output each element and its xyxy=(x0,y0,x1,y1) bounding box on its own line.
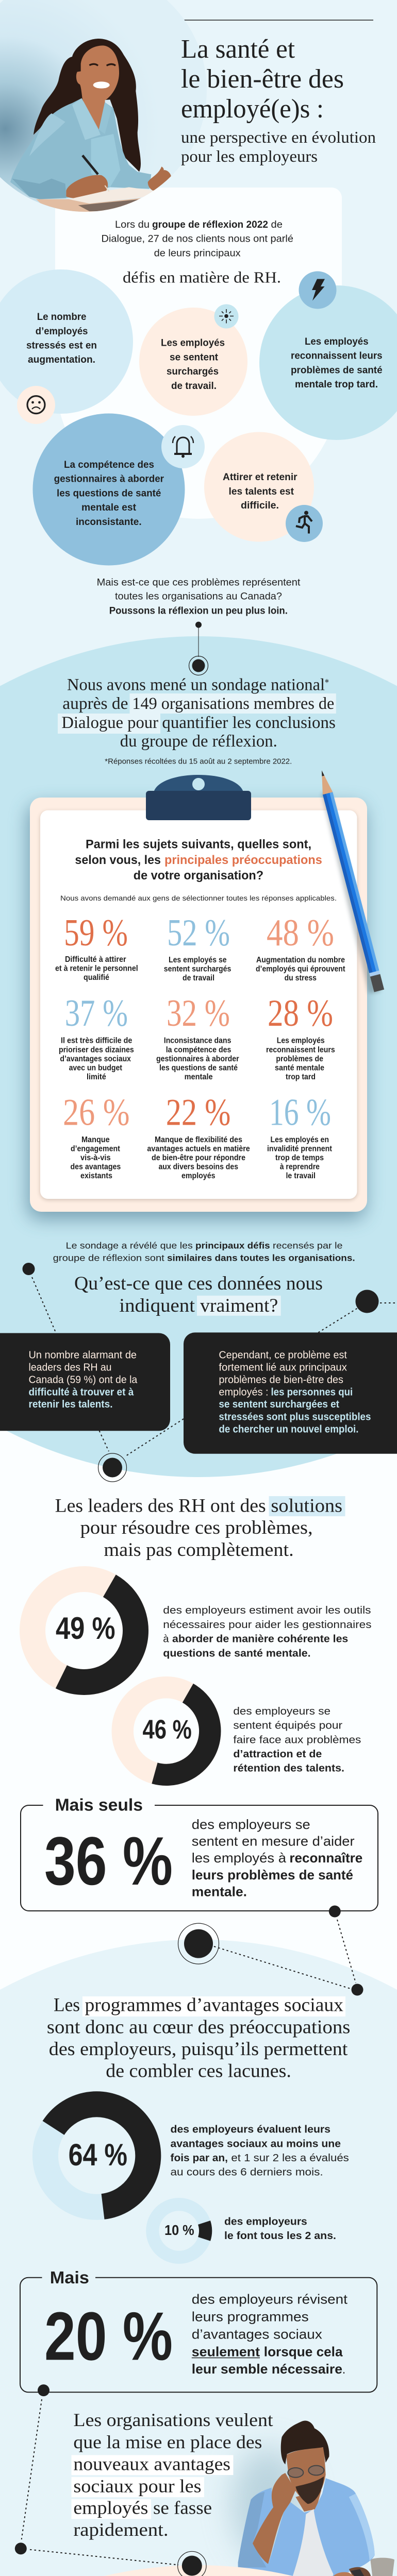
heading: national survey: * xyxy=(325,677,329,688)
bubble: attract and retain: difficile. xyxy=(241,500,279,511)
stat: 32 %: gestionnaires à aborder xyxy=(156,1055,239,1063)
bubble: manager competence xyxy=(33,413,185,566)
bubble: overloaded employees: surchargés xyxy=(167,366,219,377)
text: 64 % description: des employeurs évaluent leurs xyxy=(170,2124,330,2136)
bubble: attract and retain xyxy=(204,432,314,542)
text: 64 % description: et 1 sur 2 les a évalués xyxy=(231,2153,349,2164)
panel: dark box left: retenir les talents. xyxy=(29,1399,112,1410)
stat: 22 %: Manque de flexibilité des xyxy=(155,1136,242,1144)
stat: 26 %: 26 % xyxy=(63,1091,130,1133)
stat: 37 % xyxy=(59,992,134,1081)
stat: 26 %: des avantages xyxy=(70,1163,121,1172)
text: 49 % description: à xyxy=(163,1633,169,1645)
connector: closing ring xyxy=(178,2551,206,2576)
bubble: manager competence: gestionnaires à aborder xyxy=(54,473,164,485)
text: 46 % description: faire face aux problèmes xyxy=(233,1734,361,1745)
bubble: overloaded employees: de travail. xyxy=(171,380,217,392)
panel: dark box left: difficulté à trouver et à xyxy=(29,1387,134,1398)
callout: Mais 20 %: Mais xyxy=(50,2268,89,2287)
text: 10 % description xyxy=(224,2216,336,2242)
connector: dots after callout xyxy=(178,1905,363,1996)
stat: 26 %: Manque xyxy=(81,1136,110,1144)
hero photo illustration: woman writing xyxy=(0,0,207,214)
transition text: Poussons la réflexion un peu plus loin. xyxy=(109,605,288,617)
text: 46 % description: sentent équipés pour xyxy=(233,1720,342,1731)
stat: 32 %: les questions de santé xyxy=(159,1064,238,1073)
panel: closing peach section xyxy=(0,2565,397,2576)
intro text xyxy=(101,219,293,286)
callout: Mais seuls 36 %: 36 % xyxy=(44,1823,173,1900)
stat: 22 %: avantages actuels en matière xyxy=(147,1144,250,1153)
bubble: stressed employees xyxy=(0,269,133,414)
donut chart: 49 %: 49 % xyxy=(56,1611,115,1646)
logo wordmark: Dialogue xyxy=(40,11,100,29)
donut chart: 49 % xyxy=(13,1560,155,1701)
subtitle: pour les employeurs xyxy=(181,147,318,165)
text: 49 % description xyxy=(163,1605,371,1659)
text: 49 % description: aborder de manière cohérente les xyxy=(172,1633,348,1645)
stat: 32 %: Inconsistance dans xyxy=(164,1037,231,1045)
text: 64 % description: au cours des 6 derniers mois. xyxy=(170,2166,323,2178)
text: 49 % description: des employeurs estiment avoir les outils xyxy=(163,1605,371,1616)
stat: 59 % xyxy=(55,912,138,982)
survey question: principales préoccupations xyxy=(164,853,322,867)
stat: 32 %: mentale xyxy=(185,1073,213,1081)
clip xyxy=(146,775,251,820)
icon: running person xyxy=(286,505,323,542)
callout: Mais seuls 36 %: reconnaître xyxy=(289,1850,362,1866)
heading: what do the data say xyxy=(74,1273,323,1316)
connector: dots after 20 % callout xyxy=(15,2384,178,2565)
stat: 28 %: santé mentale xyxy=(275,1064,324,1073)
stat: 37 %: limité xyxy=(87,1073,106,1081)
stat: 26 %: vis-à-vis xyxy=(80,1154,111,1162)
icon: Dialogue heart xyxy=(24,15,35,26)
donut chart: 10 % xyxy=(145,2197,212,2264)
title xyxy=(181,35,376,165)
callout: Mais 20 %: des employeurs révisent xyxy=(192,2291,348,2307)
stat: 28 %: trop tard xyxy=(286,1073,316,1081)
callout: Mais seuls 36 %: leurs problèmes de santé xyxy=(192,1867,353,1883)
panel: dark box left: leaders des RH au xyxy=(29,1362,111,1374)
connector: dotted network xyxy=(23,1263,397,1482)
stat: 59 %: Difficulté à attirer xyxy=(65,955,126,964)
survey instruction: Nous avons demandé aux gens de sélectionner toutes les réponses applicables. xyxy=(60,894,337,902)
callout: Mais seuls 36 %: les employés à xyxy=(192,1850,287,1866)
survey conclusion text: groupe de réflexion sont xyxy=(53,1253,164,1263)
survey question xyxy=(75,838,322,883)
donut chart: 46 %: 46 % xyxy=(142,1715,192,1744)
stat: 26 % xyxy=(63,1091,130,1180)
stat: 59 %: et à retenir le personnel xyxy=(55,964,138,973)
bubble: late recognition: mentale trop tard. xyxy=(295,379,378,390)
heading: organisations want speed xyxy=(71,2410,273,2540)
subtitle: une perspective en évolution xyxy=(181,128,376,146)
text: 64 % description: avantages sociaux au moins une xyxy=(170,2138,341,2149)
heading: HR leaders have solutions xyxy=(55,1496,345,1561)
text: 49 % description: questions de santé mentale. xyxy=(163,1648,311,1659)
heading: benefits programmes: sont donc au cœur des préoccupations xyxy=(47,2016,350,2038)
title: le bien-être des xyxy=(181,64,344,94)
callout: Mais 20 %: lorsque cela xyxy=(264,2344,343,2360)
stat: 48 %: du stress xyxy=(285,974,317,982)
text: 64 % description: fois par an, xyxy=(170,2153,228,2164)
stat: 26 %: d’engagement xyxy=(71,1144,120,1153)
panel: dark box left xyxy=(0,1333,170,1431)
stat: 37 %: prioriser des dizaines xyxy=(59,1045,134,1054)
photo illustration: man on the phone xyxy=(232,2421,397,2576)
bubble: attract and retain: les talents est xyxy=(229,486,294,497)
callout: Mais 20 %: leur semble nécessaire xyxy=(192,2361,342,2377)
heading: national survey: auprès de xyxy=(62,694,128,713)
text: 10 % description: le font tous les 2 ans. xyxy=(224,2230,336,2242)
panel: dark box right: Cependant, ce problème est xyxy=(219,1350,347,1361)
panel: dark box right: problèmes de bien-être des xyxy=(219,1375,343,1386)
stat: 52 %: sentent surchargés xyxy=(164,965,231,974)
survey question: Parmi les sujets suivants, quelles sont, xyxy=(86,838,311,852)
callout: Mais seuls 36 %: mentale. xyxy=(192,1884,247,1899)
donut chart: 64 % xyxy=(26,2084,168,2227)
heading: organisations want speed: que la mise en place des xyxy=(73,2432,262,2452)
transition text: toutes les organisations au Canada? xyxy=(115,591,282,602)
heading: benefits programmes xyxy=(47,1995,350,2082)
bubble: overloaded employees: Les employés xyxy=(161,337,225,349)
callout: Mais 20 %: seulement xyxy=(192,2344,260,2360)
intro text: groupe de réflexion 2022 xyxy=(152,219,268,230)
stat: 22 %: aux divers besoins des xyxy=(159,1163,238,1172)
stat: 52 %: de travail xyxy=(183,974,214,982)
panel: dark box right: stressées sont plus susceptibles xyxy=(219,1412,371,1423)
callout: Mais 20 %: leurs programmes xyxy=(192,2309,309,2324)
intro text: Dialogue, 27 de nos clients nous ont parlé xyxy=(101,233,293,244)
text: 46 % description: d’attraction et de xyxy=(233,1749,322,1760)
stat: 22 % xyxy=(147,1091,250,1180)
heading: benefits programmes: programmes d’avantages sociaux xyxy=(85,1995,343,2015)
heading: HR leaders have solutions: Les leaders des RH ont des xyxy=(55,1496,266,1517)
survey section background arc xyxy=(0,636,397,1477)
bubble: manager competence: mentale est xyxy=(81,502,136,513)
heading: national survey: Nous avons mené un sondage national xyxy=(67,676,325,694)
stat: 28 %: problèmes de xyxy=(276,1055,323,1063)
bubble: stressed employees: augmentation. xyxy=(28,354,95,365)
subtitle xyxy=(181,128,376,165)
intro text: défis en matière de RH. xyxy=(123,268,281,286)
donut chart: 10 %: 10 % xyxy=(164,2222,194,2238)
heading: national survey xyxy=(58,676,336,751)
bubble: overloaded employees: se sentent xyxy=(170,351,218,363)
heading: national survey: Dialogue pour xyxy=(61,714,158,732)
panel: dark box right: de chercher un nouvel emploi. xyxy=(219,1423,359,1435)
donut chart: 46 % xyxy=(107,1671,226,1791)
text: 46 % description: des employeurs se xyxy=(233,1706,330,1717)
stat: 28 %: Les employés xyxy=(277,1037,325,1045)
transition text xyxy=(97,577,301,617)
stat: 22 %: employés xyxy=(181,1172,216,1180)
icon: pencil xyxy=(317,769,384,993)
panel: clipboard xyxy=(28,775,367,1219)
heading: organisations want speed: Les organisations veulent xyxy=(73,2410,273,2430)
heading: organisations want speed: sociaux pour les xyxy=(73,2476,201,2497)
heading: HR leaders have solutions: mais pas complètement. xyxy=(104,1539,294,1561)
intro text: Lors du xyxy=(115,219,150,230)
panel: dark box right: employés : xyxy=(219,1387,269,1398)
bubble: late recognition: Les employés xyxy=(305,336,369,347)
survey conclusion text: principaux défis xyxy=(195,1241,270,1251)
icon: bell xyxy=(161,425,205,468)
panel: dark box right: se sentent surchargées et xyxy=(219,1399,339,1410)
callout: Mais 20 % xyxy=(20,2268,377,2392)
title: employé(e)s : xyxy=(181,94,324,124)
heading: benefits programmes: des employeurs, puisqu’ils permettent xyxy=(49,2039,348,2060)
panel: dark box right: fortement lié aux principaux xyxy=(219,1362,347,1374)
heading: national survey: quantifier les conclusions xyxy=(162,714,336,732)
stat: 32 % xyxy=(156,992,239,1081)
icon: sun spark xyxy=(214,304,238,329)
stat: 48 %: 48 % xyxy=(267,912,334,954)
callout: Mais 20 %: d’avantages sociaux xyxy=(192,2327,322,2342)
heading: organisations want speed: employés xyxy=(73,2498,148,2518)
panel: dark box right: les personnes qui xyxy=(271,1387,353,1398)
heading: benefits programmes: de combler ces lacunes. xyxy=(106,2061,291,2082)
stat: 37 %: Il est très difficile de xyxy=(61,1037,133,1045)
stat: 16 %: le travail xyxy=(286,1172,316,1180)
intro text: de leurs principaux xyxy=(154,247,241,259)
heading: national survey: 149 organisations membres de xyxy=(132,694,334,713)
heading: what do the data say: Qu’est-ce que ces données nous xyxy=(74,1273,323,1294)
heading: what do the data say: vraiment? xyxy=(200,1295,278,1316)
callout: Mais seuls 36 %: des employeurs se xyxy=(192,1817,310,1832)
stat: 22 %: 22 % xyxy=(166,1091,230,1133)
survey conclusion text: similaires dans toutes les organisations. xyxy=(167,1253,355,1263)
heading: HR leaders have solutions: pour résoudre ces problèmes, xyxy=(80,1517,313,1538)
stat: 32 %: la compétence des xyxy=(166,1045,231,1054)
panel: intro card xyxy=(55,188,342,519)
survey conclusion text: Le sondage a révélé que les xyxy=(66,1241,193,1251)
header: logo and rule xyxy=(24,11,373,29)
heading: organisations want speed: nouveaux avantages xyxy=(73,2454,230,2475)
stat: 37 %: 37 % xyxy=(65,992,128,1035)
text: 10 % description: des employeurs xyxy=(224,2216,307,2227)
survey question: de votre organisation? xyxy=(134,869,263,883)
intro text: de xyxy=(271,219,283,230)
survey conclusion text xyxy=(53,1241,355,1263)
stat: 16 % xyxy=(267,1091,332,1180)
stat: 32 %: 32 % xyxy=(167,992,230,1035)
stat: 28 % xyxy=(266,992,335,1081)
stat: 16 %: trop de temps xyxy=(275,1154,324,1162)
stat: 59 %: 59 % xyxy=(64,912,128,954)
bubble: attract and retain: Attirer et retenir xyxy=(223,471,297,483)
survey question: selon vous, les xyxy=(75,853,161,867)
callout: Mais 20 %: . xyxy=(342,2361,345,2377)
callout: Mais seuls 36 %: Mais seuls xyxy=(55,1795,143,1815)
donut chart: 64 %: 64 % xyxy=(69,2138,127,2172)
stat: 16 %: 16 % xyxy=(269,1091,331,1133)
icon: lightning bolt xyxy=(299,271,336,309)
panel: dark box left: Canada (59 %) ont de la xyxy=(29,1375,138,1386)
bubble: stressed employees: Le nombre xyxy=(37,311,87,323)
stat: 37 %: avec un budget xyxy=(69,1064,122,1073)
bubble: stressed employees: d’employés xyxy=(36,326,88,337)
page background: top xyxy=(0,0,397,1430)
stat: 48 % xyxy=(256,912,345,982)
heading: HR leaders have solutions: solutions xyxy=(271,1496,342,1517)
stat: 26 %: existants xyxy=(80,1172,112,1180)
text: 46 % description: rétention des talents. xyxy=(233,1763,344,1774)
bubble: manager competence: les questions de santé xyxy=(57,488,161,499)
heading: national survey: du groupe de réflexion. xyxy=(120,732,277,751)
stat: 28 %: 28 % xyxy=(268,992,333,1035)
bubble: manager competence: La compétence des xyxy=(64,459,154,470)
callout: Mais seuls 36 %: sentent en mesure d’aider xyxy=(192,1833,355,1849)
stat: 52 %: Les employés se xyxy=(169,956,227,964)
stat: 52 % xyxy=(164,912,231,982)
stat: 22 %: de bien-être pour répondre xyxy=(152,1154,245,1162)
bubble: overloaded employees xyxy=(139,308,247,416)
connector: pin xyxy=(189,622,208,675)
stat: 28 %: reconnaissent leurs xyxy=(266,1045,335,1054)
text: 64 % description xyxy=(170,2124,349,2178)
transition text: Mais est-ce que ces problèmes représentent xyxy=(97,577,301,588)
stat: 48 %: d’employés qui éprouvent xyxy=(256,965,345,974)
panel: dark box right xyxy=(184,1332,397,1454)
stat: 59 %: qualifié xyxy=(84,973,109,982)
heading: organisations want speed: rapidement. xyxy=(73,2519,169,2540)
callout: Mais seuls 36 % xyxy=(21,1795,378,1911)
bubble: stressed employees: stressés est en xyxy=(26,340,97,351)
benefits section background arc xyxy=(0,1940,397,2576)
stat: 48 %: Augmentation du nombre xyxy=(256,956,345,964)
panel: dark box left: Un nombre alarmant de xyxy=(29,1350,137,1361)
heading: organisations want speed: se fasse xyxy=(153,2498,212,2518)
bubble: late recognition: reconnaissent leurs xyxy=(291,350,383,361)
stat: 16 %: à reprendre xyxy=(280,1163,320,1172)
stat: 16 %: Les employés en xyxy=(270,1136,329,1144)
bubble: manager competence: inconsistante. xyxy=(76,516,142,528)
page background: middle xyxy=(0,1430,397,1996)
heading: benefits programmes: Les xyxy=(54,1995,80,2015)
title: La santé et xyxy=(181,35,295,64)
bubble: late recognition: problèmes de santé xyxy=(291,364,383,376)
stat: 37 %: d’avantages sociaux xyxy=(60,1055,131,1063)
bubble: late recognition xyxy=(259,285,397,440)
icon: sad face xyxy=(17,386,55,424)
stat: 16 %: invalidité prennent xyxy=(267,1144,332,1153)
heading: what do the data say: indiquent xyxy=(119,1295,195,1316)
callout: Mais 20 %: 20 % xyxy=(44,2298,173,2375)
footnote: *Réponses récoltées du 15 août au 2 septembre 2022. xyxy=(105,757,292,766)
text: 49 % description: nécessaires pour aider les gestionnaires xyxy=(163,1619,371,1631)
stat: 52 %: 52 % xyxy=(167,912,230,954)
survey conclusion text: recensés par le xyxy=(273,1241,342,1251)
text: 46 % description xyxy=(233,1706,361,1774)
